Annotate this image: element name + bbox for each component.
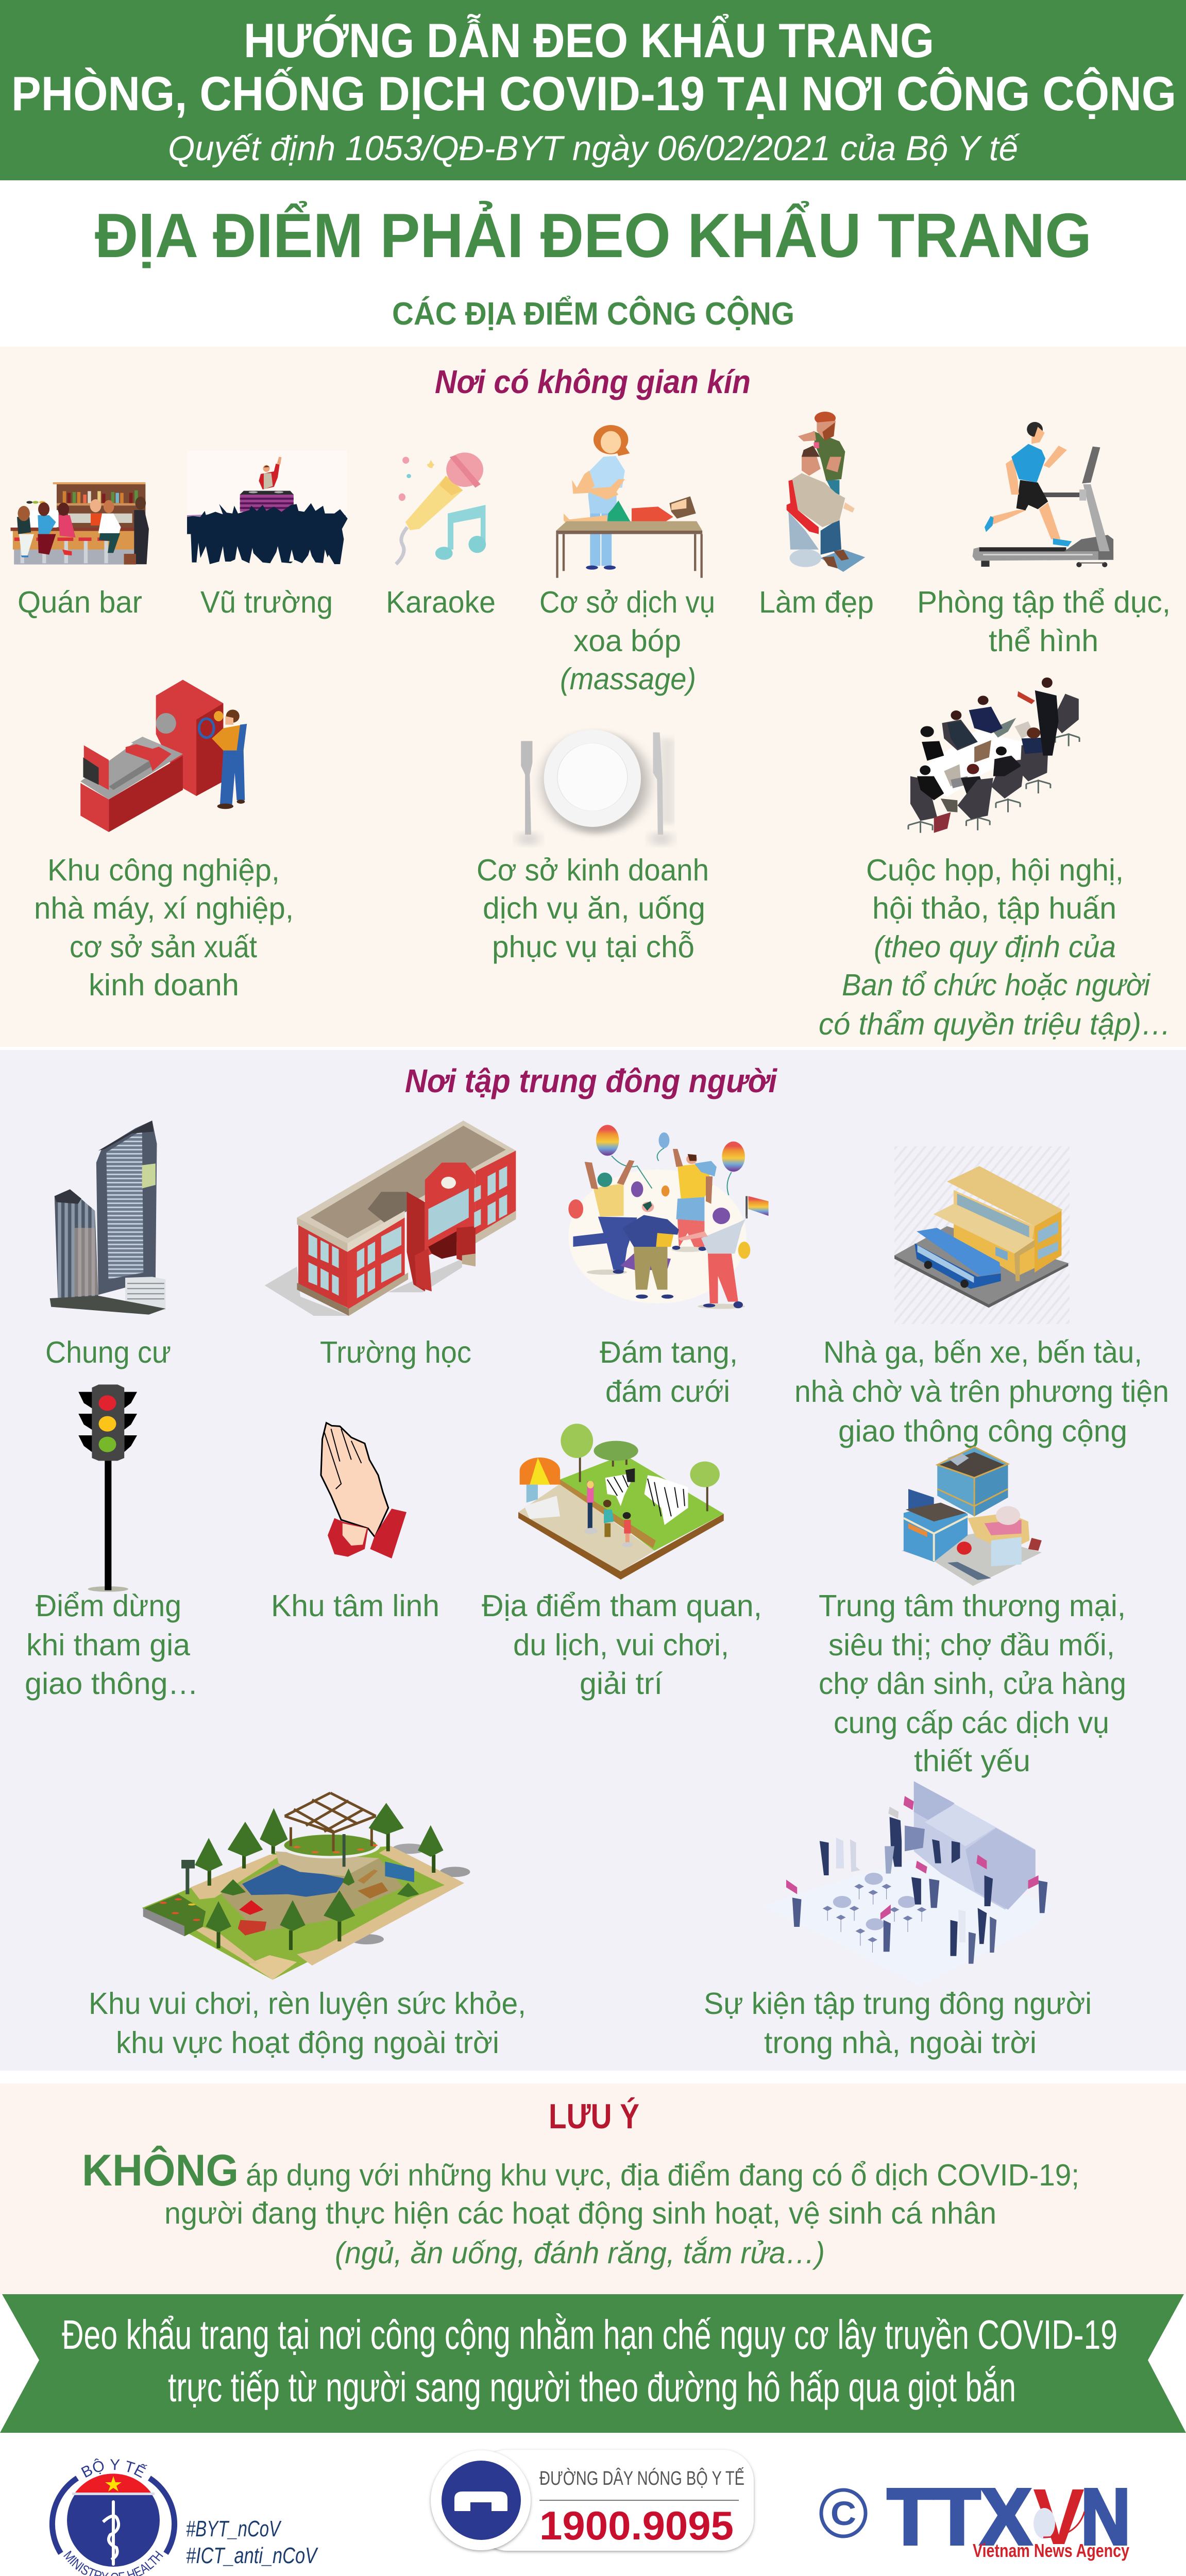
- logo: Ministry of Health: BỘ Y TẾ: [81, 2459, 147, 2478]
- icon: plate and cutlery: [520, 730, 671, 845]
- label: massage: Cơ sở dịch vụ: [539, 585, 715, 619]
- main heading: ĐỊA ĐIỂM PHẢI ĐEO KHẨU TRANG: [95, 200, 1092, 270]
- hotline label: ĐƯỜNG DÂY NÓNG BỘ Y TẾ: [539, 2467, 744, 2489]
- label: large events: Sự kiện tập trung đông người: [704, 1987, 1092, 2021]
- label: bar: Quán bar: [18, 585, 142, 619]
- label: karaoke: Karaoke: [386, 585, 496, 619]
- label: meeting: [819, 853, 1171, 1041]
- icon: beauty salon: [787, 412, 865, 572]
- panel: crowded places: [0, 1050, 1186, 2071]
- subtitle: Quyết định 1053/QĐ-BYT ngày 06/02/2021 của Bộ Y tế: [168, 129, 1020, 168]
- icon: praying hands: [321, 1423, 406, 1558]
- icon: meeting: [908, 677, 1079, 833]
- note text: (ngủ, ăn uống, đánh răng, tắm rửa…): [335, 2236, 825, 2270]
- icon: nightclub: [187, 451, 348, 564]
- label: meeting: Ban tổ chức hoặc người: [842, 968, 1151, 1002]
- label: massage: [539, 585, 715, 696]
- icon: massage: [556, 425, 703, 578]
- label: funerals and weddings: [600, 1335, 738, 1409]
- header banner: [0, 0, 1186, 180]
- label: massage: xoa bóp: [573, 624, 681, 658]
- label: gym: [917, 585, 1171, 658]
- icon: station and bus: [894, 1146, 1070, 1324]
- label: factory: [34, 853, 294, 1002]
- label: apartment: Chung cư: [45, 1335, 171, 1369]
- logo: TTXVN: Vietnam News Agency: [973, 2540, 1129, 2561]
- icon: crowd celebration: [568, 1125, 769, 1309]
- label: shopping centres: thiết yếu: [914, 1744, 1030, 1778]
- icon: bar: [11, 482, 149, 565]
- label: transport hubs: Nhà ga, bến xe, bến tàu,: [823, 1335, 1142, 1369]
- note text: [164, 2158, 1079, 2270]
- icon: shopping mall: [902, 1447, 1042, 1586]
- label: shopping centres: siêu thị; chợ đầu mối,: [828, 1628, 1115, 1662]
- label: outdoor areas: Khu vui chơi, rèn luyện sức khỏe,: [89, 1987, 526, 2021]
- hotline badge: [431, 2450, 754, 2551]
- label: outdoor areas: khu vực hoạt động ngoài trời: [116, 2026, 499, 2060]
- note heading: LƯU Ý: [549, 2097, 639, 2136]
- label: shopping centres: Trung tâm thương mại,: [819, 1589, 1126, 1623]
- title: HƯỚNG DẪN ĐEO KHẨU TRANG: [244, 13, 934, 67]
- label: transport hubs: giao thông công cộng: [838, 1414, 1127, 1448]
- title: [11, 13, 1176, 121]
- hashtags: #ICT_anti_nCoV: [186, 2543, 318, 2568]
- logo: TTXVN: C: [831, 2494, 856, 2532]
- label: transport hubs: nhà chờ và trên phương tiện: [794, 1375, 1169, 1409]
- note text: áp dụng với những khu vực, địa điểm đang có ổ dịch COVID-19;: [246, 2158, 1079, 2192]
- label: funerals and weddings: đám cưới: [605, 1375, 730, 1409]
- label: large events: trong nhà, ngoài trời: [764, 2026, 1037, 2060]
- label: factory: nhà máy, xí nghiệp,: [34, 891, 294, 925]
- icon: factory: [80, 680, 247, 832]
- heading: crowded places: Nơi tập trung đông người: [405, 1062, 777, 1099]
- section heading: CÁC ĐỊA ĐIỂM CÔNG CỘNG: [392, 296, 794, 332]
- ribbon text: [62, 2312, 1117, 2410]
- label: traffic stops: Điểm dừng: [36, 1589, 181, 1623]
- label: restaurant: [477, 853, 709, 964]
- logo: TTXVN: V: [1033, 2472, 1085, 2561]
- label: traffic stops: giao thông…: [25, 1667, 198, 1701]
- label: meeting: hội thảo, tập huấn: [872, 891, 1116, 925]
- hashtags: #BYT_nCoV: [186, 2516, 282, 2541]
- label: gym: thể hình: [989, 624, 1098, 658]
- icon: apartment towers: [50, 1121, 165, 1315]
- icon: gym treadmill: [973, 422, 1113, 567]
- label: school: Trường học: [320, 1335, 471, 1369]
- label: large events: [704, 1987, 1092, 2060]
- label: massage: (massage): [560, 662, 696, 696]
- label: restaurant: phục vụ tại chỗ: [492, 930, 694, 964]
- icon: outdoor park: [142, 1793, 470, 1980]
- label: transport hubs: [794, 1335, 1169, 1448]
- label: tourist sites: Địa điểm tham quan,: [482, 1589, 762, 1623]
- icon: zoo park: [518, 1423, 724, 1580]
- icon: indoor outdoor event: [762, 1781, 1054, 1986]
- label: meeting: có thẩm quyền triệu tập)…: [819, 1007, 1171, 1041]
- label: traffic stops: [25, 1589, 198, 1701]
- hotline number: 1900.9095: [539, 2503, 734, 2548]
- label: restaurant: dịch vụ ăn, uống: [483, 891, 705, 925]
- ribbon banner: [0, 2294, 1186, 2433]
- panel: enclosed spaces: [0, 347, 1186, 1047]
- logo: TTXVN: [821, 2472, 1130, 2561]
- label: gym: Phòng tập thể dục,: [917, 585, 1171, 619]
- label: factory: kinh doanh: [89, 968, 239, 1002]
- note text: người đang thực hiện các hoạt động sinh hoạt, vệ sinh cá nhân: [164, 2196, 996, 2230]
- icon: school: [265, 1121, 516, 1316]
- icon: traffic light: [78, 1384, 137, 1592]
- label: tourist sites: giải trí: [580, 1667, 663, 1701]
- logo: Ministry of Health: [49, 2459, 177, 2576]
- hashtags: [186, 2516, 318, 2568]
- label: outdoor areas: [89, 1987, 526, 2060]
- icon: phone: [442, 2461, 521, 2540]
- label: meeting: Cuộc họp, hội nghị,: [866, 853, 1124, 887]
- logo: TTXVN: N: [1081, 2472, 1130, 2561]
- label: beauty salon: Làm đẹp: [759, 585, 874, 619]
- note emphasis: KHÔNG: [82, 2146, 239, 2195]
- label: restaurant: Cơ sở kinh doanh: [477, 853, 709, 887]
- label: nightclub: Vũ trường: [200, 585, 333, 619]
- panel: note: [0, 2083, 1186, 2294]
- icon: karaoke: [396, 452, 486, 564]
- label: tourist sites: [482, 1589, 762, 1701]
- label: shopping centres: [819, 1589, 1126, 1778]
- label: meeting: (theo quy định của: [874, 930, 1116, 964]
- label: traffic stops: khi tham gia: [26, 1628, 190, 1662]
- label: factory: Khu công nghiệp,: [47, 853, 280, 887]
- heading: enclosed spaces: Nơi có không gian kín: [435, 363, 751, 400]
- label: shopping centres: chợ dân sinh, cửa hàng: [819, 1667, 1126, 1701]
- label: factory: cơ sở sản xuất: [70, 930, 257, 964]
- label: funerals and weddings: Đám tang,: [600, 1335, 738, 1369]
- label: shopping centres: cung cấp các dịch vụ: [834, 1706, 1109, 1740]
- label: spiritual sites: Khu tâm linh: [271, 1589, 439, 1623]
- logo: TTXVN: TTX: [887, 2472, 1031, 2561]
- label: tourist sites: du lịch, vui chơi,: [513, 1628, 729, 1662]
